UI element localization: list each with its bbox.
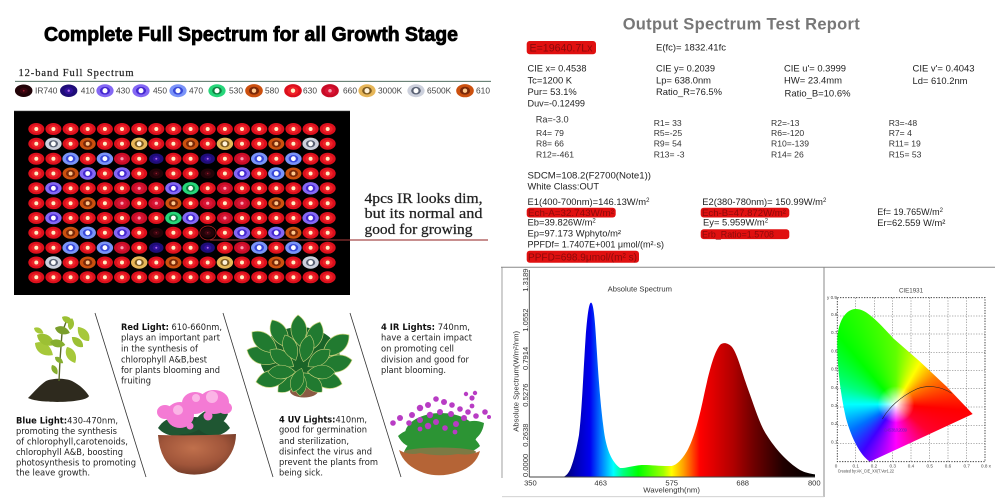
text: colour metrics (528, 63, 974, 109)
text: SDCM and white class (528, 169, 651, 191)
red badge: Erb ratio: Erb_Ratio=1.5708 (702, 230, 774, 240)
red badge: Ech-B: Ech-B=47.872W/m² (702, 208, 786, 218)
text: irradiance left column (528, 196, 664, 250)
text: irradiance right column: 2 (940, 208, 944, 214)
chart: CIE1931 diagram: 0.7 (831, 330, 838, 335)
text: red light: for plants blooming and (121, 366, 220, 376)
chart: CIE1931 diagram: 0.8 (831, 312, 838, 317)
text: colour metrics: Ld= 610.2nm (912, 75, 968, 86)
legend: LED bands: 660 (343, 86, 357, 96)
text: UV lights (279, 416, 378, 479)
text: UV lights: prevent the plants from (279, 458, 378, 468)
text: blue light (16, 416, 136, 478)
red badge: illuminance: E=19640.7Lx (530, 42, 593, 54)
legend: LED bands: 430 (116, 86, 130, 96)
icon: orchid in terracotta pot (390, 391, 491, 475)
chart: CIE1931 diagram: 0.7 (964, 464, 970, 468)
text: colour rendering values: R9= 54 (654, 139, 682, 149)
chart: absolute spectrum: 688 (736, 479, 749, 488)
chart: absolute spectrum: 0.0000 (521, 454, 530, 477)
text: UV lights: and sterilization, (279, 437, 349, 447)
text: irradiance right column (877, 207, 945, 228)
chart: absolute spectrum: 0.2638 (521, 423, 530, 447)
text: red light: in the synthesis of (121, 345, 199, 355)
panel: LED grid (14, 111, 350, 295)
text: colour metrics: Pur= 53.1% (528, 86, 577, 97)
text: irradiance left column: 2 (646, 198, 650, 204)
chart: absolute spectrum: 800 (808, 479, 821, 488)
chart: CIE1931 diagram: 0.2 (831, 421, 838, 426)
text: colour rendering values: R4= 79 (536, 128, 564, 138)
text: blue light: the leave growth. (16, 468, 90, 478)
legend: LED bands: 6500K (427, 86, 452, 96)
text: colour rendering values: R13= -3 (654, 149, 685, 159)
text: colour rendering values: R7= 4 (889, 128, 912, 138)
text: blue light: photosynthesis to promoting (16, 458, 136, 468)
chart: CIE1931 diagram: CIE1931 (899, 287, 924, 294)
text: colour rendering values: Ra=-3.0 (536, 115, 569, 125)
chart: absolute spectrum: 1.0552 (521, 308, 530, 332)
text: colour metrics: Ratio_R=76.5% (656, 86, 722, 97)
text: SDCM and white class: White Class:OUT (528, 180, 599, 191)
text: colour metrics: HW= 23.4mm (784, 74, 842, 86)
text: blue light: chlorophyll A&B, boosting (16, 448, 123, 458)
text: colour metrics: CIE u'= 0.3999 (784, 63, 846, 74)
text: red light: fruiting (121, 376, 151, 386)
text: colour metrics: Tc=1200 K (528, 74, 573, 85)
legend: LED bands (15, 84, 490, 97)
text: irradiance middle column: 2 (765, 219, 769, 225)
chart: CIE1931 diagram: 0.8 x (981, 464, 992, 468)
diagonal dividers (95, 313, 401, 477)
chart: CIE1931 diagram: 0.4 (908, 464, 915, 468)
text: irradiance middle column: 2 (823, 198, 827, 204)
text: blue light: promoting the synthesis (16, 427, 117, 437)
text: colour rendering values: R2=-13 (771, 118, 800, 128)
text: colour rendering values: R3=-48 (889, 118, 917, 128)
text: irradiance middle column (702, 196, 827, 228)
text: SDCM and white class: SDCM=108.2(F2700(Note1)) (528, 169, 651, 180)
text: colour rendering values: R15= 53 (889, 149, 922, 159)
chart: CIE1931 diagram: 0.6 (945, 464, 952, 468)
text: irradiance middle column: E2(380-780nm)= 150.99W/m (702, 196, 823, 207)
chart: CIE1931 diagram: 0.4 (831, 385, 838, 390)
text: irradiance right column: Er=62.559 W/m² (877, 217, 945, 228)
text: IR lights: division and good for (381, 355, 469, 365)
callout: IR note (350, 191, 488, 240)
text: colour rendering values: R6=-120 (771, 128, 804, 138)
text: colour rendering values: R8= 66 (536, 139, 564, 149)
legend: LED bands: 3000K (378, 86, 403, 96)
text: blue light: Blue Light:430-470nm, (16, 416, 118, 426)
text: red light: Red Light: 610-660nm, (121, 323, 222, 333)
text: colour rendering values: R1= 33 (654, 118, 682, 128)
chart: CIE1931 diagram: Created by:AK_CIE_XX(T.Ver1.22 (838, 468, 894, 473)
text: colour metrics: CIE v'= 0.4043 (912, 63, 974, 74)
chart: absolute spectrum: 575 (665, 479, 678, 488)
legend: LED bands: 410 (81, 86, 95, 96)
legend: LED bands: 470 (189, 86, 203, 96)
chart: CIE1931 diagram: 0.5 (831, 366, 838, 372)
chart: absolute spectrum: 0.5276 (521, 383, 530, 407)
text: irradiance left column: Eb=39.826W/m (528, 217, 592, 228)
chart: CIE1931 diagram: 0.5 (927, 464, 933, 468)
text: UV lights: 4 UV Lights:410nm, (279, 416, 367, 426)
text: irradiance right column: Ef= 19.765W/m (877, 207, 940, 217)
chart: absolute spectrum (512, 268, 821, 494)
text: colour rendering values: R5=-25 (654, 128, 682, 138)
legend: LED bands: 580 (265, 86, 279, 96)
chart: absolute spectrum: Wavelength(nm) (643, 485, 700, 494)
text: irradiance middle column: Ey= 5.959W/m (703, 217, 765, 228)
text: blue light: of chlorophyll,carotenoids, (16, 437, 128, 447)
chart: CIE1931 diagram: 0.1 (831, 440, 838, 444)
text: red light (121, 323, 222, 386)
chart: CIE1931 diagram: 0.6 (831, 348, 838, 354)
chart: absolute spectrum: 0.7914 (521, 347, 530, 370)
legend: LED bands: 610 (476, 86, 490, 96)
text: IR lights: plant blooming. (381, 366, 446, 376)
legend: LED bands: IR740 (35, 86, 58, 96)
red badge: PPFD: PPFD=698.9μmol/(m² s) (528, 252, 637, 264)
text: colour rendering values (536, 115, 922, 159)
callout: IR note: 4pcs IR looks dim, (364, 191, 482, 207)
text: colour metrics: Duv=-0.12499 (528, 98, 585, 109)
chart: CIE1931 diagram: y 0.9 (827, 295, 837, 300)
icon: hosta plant (244, 315, 354, 398)
text: IR lights (381, 323, 473, 376)
heading: 12-band full spectrum: 12-band Full Spectrum (18, 68, 134, 79)
text: red light: plays an important part (121, 334, 221, 344)
text: illuminance fc: E(fc)= 1832.41fc (656, 42, 726, 53)
text: irradiance left column: PPFDf= 1.7407E+001 μmol/(m²·s) (528, 239, 664, 250)
chart: absolute spectrum: 350 (524, 479, 537, 488)
chart: absolute spectrum: Absolute Spectrum(W/m²/nm) (512, 331, 520, 432)
text: colour rendering values: R10=-139 (771, 139, 809, 149)
text: irradiance left column: E1(400-700nm)=146.13W/m (528, 196, 646, 207)
red badge: Ech-A: Ech-A=32.743W/m² (528, 208, 614, 218)
text: colour metrics: CIE x= 0.4538 (528, 63, 586, 74)
text: IR lights: on promoting cell (381, 345, 454, 355)
chart: CIE1931 diagram: 0.2 (871, 464, 878, 468)
chart: CIE1931 diagram (827, 288, 991, 474)
report title: Output Spectrum Test Report (623, 16, 860, 34)
text: colour rendering values: R11= 19 (889, 139, 921, 149)
text: UV lights: being sick. (279, 469, 323, 479)
icon: pink azalea in bowl (157, 390, 236, 475)
icon: sapling in soil (28, 314, 93, 402)
chart frame lines (501, 267, 995, 497)
text: colour metrics: CIE y= 0.2039 (656, 63, 715, 74)
chart: CIE1931 diagram: 0.1 (853, 464, 859, 468)
chart: absolute spectrum: 1.3189 (521, 268, 530, 292)
text: UV lights: good for germination (279, 426, 367, 436)
text: UV lights: disinfect the virus and (279, 448, 372, 458)
chart: CIE1931 diagram: 0 (835, 464, 838, 468)
title: Complete Full Spectrum for all Growth Stage (44, 23, 458, 46)
legend: LED bands: 630 (303, 86, 317, 96)
legend: LED bands: 530 (229, 86, 243, 96)
text: colour rendering values: R12=-461 (536, 149, 574, 159)
chart: CIE1931 diagram: 0.3 (831, 403, 838, 408)
callout: IR note: but its normal and (364, 206, 483, 222)
chart: absolute spectrum: Absolute Spectrum (608, 285, 672, 294)
text: colour metrics: Lp= 638.0nm (656, 74, 711, 86)
text: red light: chlorophyll A&B,best (121, 355, 208, 365)
chart: CIE1931 diagram: 0.4538,0.2039 (884, 428, 907, 432)
text: irradiance left column: Ep=97.173 Wphyto/m² (528, 228, 621, 239)
chart: CIE1931 diagram: 0.3 (890, 464, 896, 468)
text: colour rendering values: R14= 26 (771, 149, 804, 159)
callout: IR note: good for growing (364, 222, 472, 238)
legend: LED bands: 450 (153, 86, 167, 96)
text: IR lights: have a certain impact (381, 334, 473, 344)
text: IR lights: 4 IR Lights: 740nm, (381, 323, 470, 333)
text: irradiance left column: 2 (592, 219, 596, 225)
text: colour metrics: Ratio_B=10.6% (784, 88, 850, 99)
chart: absolute spectrum: 463 (594, 479, 607, 488)
